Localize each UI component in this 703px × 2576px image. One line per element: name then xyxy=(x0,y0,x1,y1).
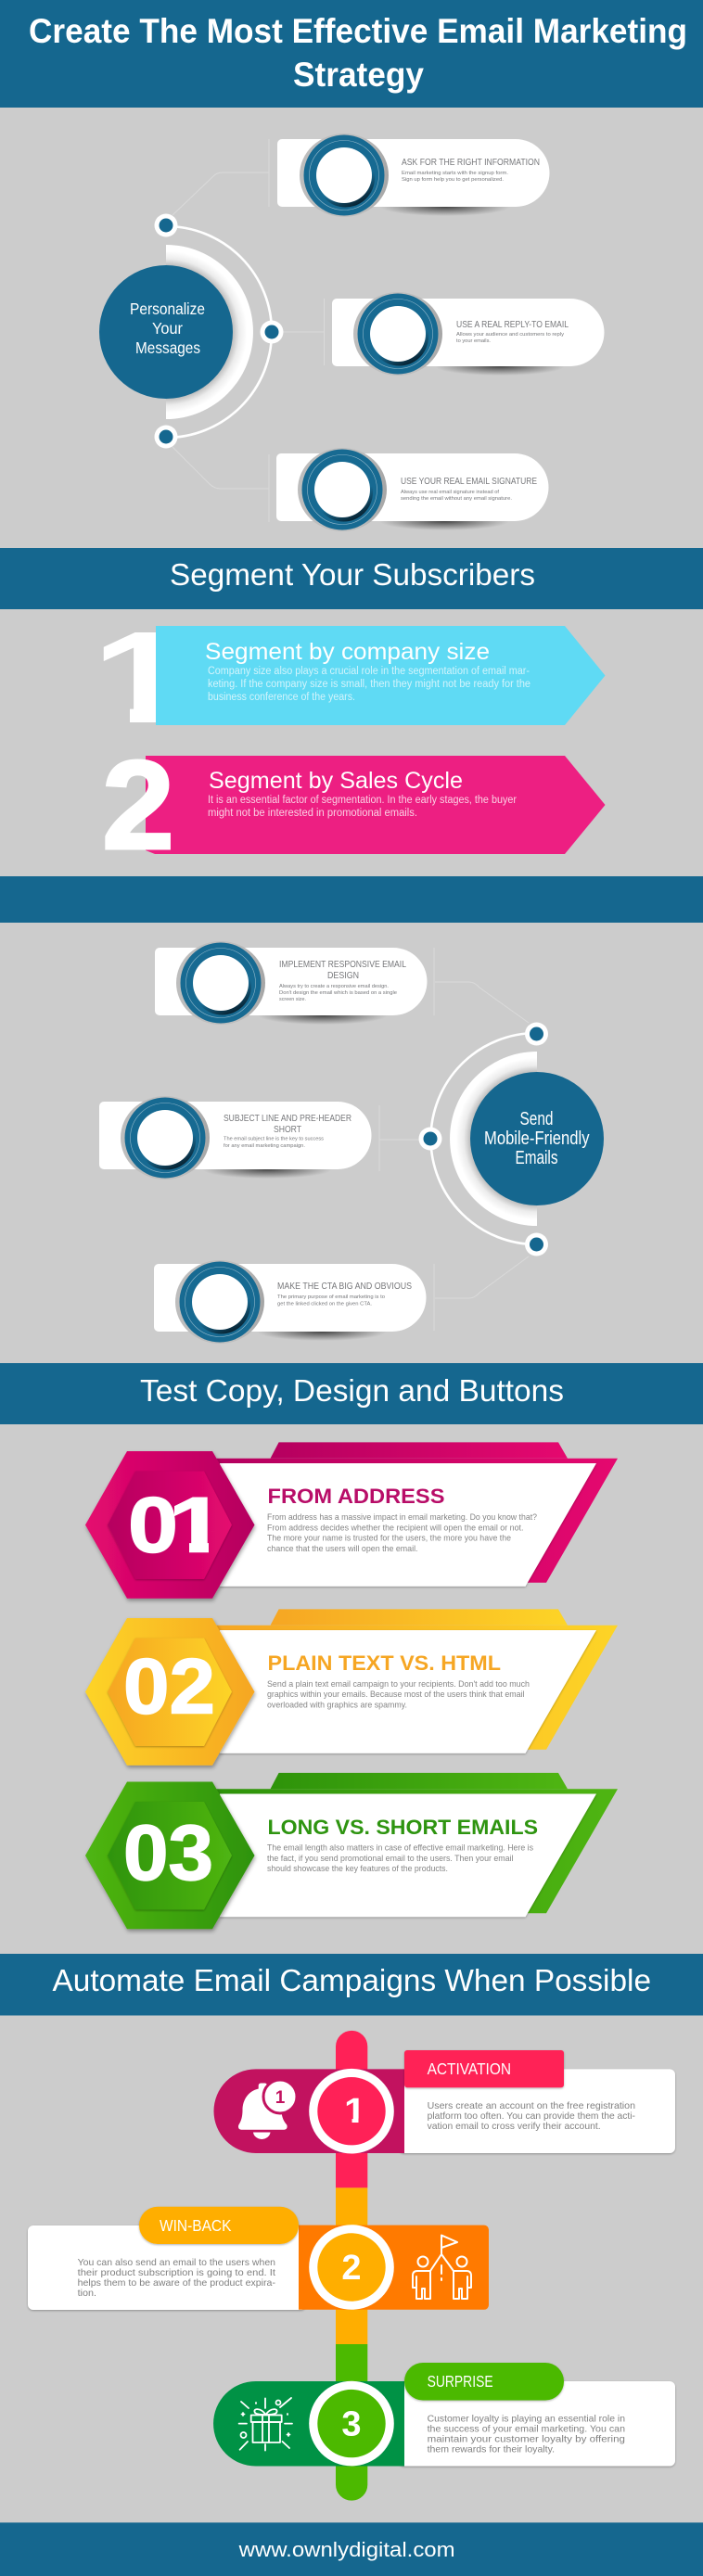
hub: personalize your messages: Personalize xyxy=(130,300,205,318)
option 02: plain text vs. html: Send a plain text email campaign to your recipients. Don't add too much xyxy=(267,1679,530,1690)
hexagon badge 01: 0 xyxy=(128,1482,178,1569)
timeline spine xyxy=(336,2031,367,2501)
hexagon badge 01: 1 xyxy=(168,1482,226,1569)
card: use your real email signature: USE YOUR REAL EMAIL SIGNATURE xyxy=(401,477,537,487)
arrow panel: segment by sales cycle xyxy=(102,734,605,875)
panel: send mobile-friendly emails xyxy=(99,941,604,1344)
step 2: win-back: You can also send an email to the users when xyxy=(78,2257,275,2268)
card: use a real reply-to email: to your emails. xyxy=(456,338,491,344)
number badge 2 xyxy=(309,2225,394,2310)
numeral 1: 1 xyxy=(91,604,192,750)
card: use your real email signature: sending the email without any email signature. xyxy=(401,496,512,502)
title banner: Create The Most Effective Email Marketing xyxy=(29,12,687,50)
arrow panel: segment by company size: keting. If the company size is small, then they might not be ready for the xyxy=(208,679,530,690)
step 2: win-back: tion. xyxy=(78,2288,96,2299)
section heading: automate email campaigns when possible xyxy=(0,1954,703,2016)
section heading: segment your subscribers xyxy=(0,548,703,609)
arrow panel: segment by company size xyxy=(104,626,605,725)
card: implement responsive email design: IMPLEMENT RESPONSIVE EMAIL xyxy=(279,960,406,970)
icon: gift box xyxy=(239,2398,292,2451)
arrow panel: segment by sales cycle: It is an essential factor of segmentation. In the early stages, the buyer xyxy=(208,795,517,806)
connector lines xyxy=(379,948,529,1331)
option 01: from address xyxy=(85,1442,618,1599)
step 3: surprise: Customer loyalty is playing an essential role in xyxy=(428,2413,625,2424)
card: ask for the right information: ASK FOR THE RIGHT INFORMATION xyxy=(402,158,540,168)
icon: notification bell: 1 xyxy=(275,2088,286,2108)
hub: send mobile-friendly emails: Emails xyxy=(516,1148,558,1168)
card: implement responsive email design: Always try to create a responsive email design. xyxy=(279,984,389,989)
title banner: Strategy xyxy=(293,56,424,94)
step 2: win-back xyxy=(28,2207,489,2310)
number badge 3: 3 xyxy=(341,2405,362,2444)
number badge 1: 1 xyxy=(344,2092,365,2131)
connector lines xyxy=(173,139,325,522)
card: implement responsive email design: DESIGN xyxy=(327,971,359,981)
option 02: plain text vs. html: overloaded with graphics are spammy. xyxy=(267,1701,407,1710)
card: ask for the right information xyxy=(277,134,549,217)
option 01: from address: From address has a massive impact in email marketing. Do you know that? xyxy=(267,1512,537,1523)
option 01: from address: The more your name is trusted for the users, the more you have the xyxy=(267,1534,511,1543)
step 3: surprise: the success of your email marketing. You can xyxy=(428,2424,625,2435)
arrow panel: segment by sales cycle: Segment by Sales Cycle xyxy=(209,768,463,794)
card: use a real reply-to email: Allows your audience and customers to reply xyxy=(456,332,564,338)
step 2: win-back: their product subscription is going to end. It xyxy=(78,2267,275,2278)
panel: personalize your messages xyxy=(99,134,605,531)
arrow panel: segment by sales cycle: might not be interested in promotional emails. xyxy=(208,808,417,819)
number badge 2: 2 xyxy=(341,2249,362,2288)
step 2: win-back: WIN-BACK xyxy=(160,2216,232,2235)
card: implement responsive email design xyxy=(155,941,427,1025)
title banner xyxy=(0,0,703,108)
option 03: long vs. short emails: should showcase the key features of the products. xyxy=(267,1864,448,1874)
card: subject line and pre-header short xyxy=(99,1096,371,1180)
hexagon badge 02 xyxy=(85,1618,254,1766)
option 02: plain text vs. html: PLAIN TEXT VS. HTML xyxy=(267,1651,501,1675)
card: subject line and pre-header short: The email subject line is the key to success xyxy=(224,1137,324,1142)
arrow panel: segment by company size: business conference of the years. xyxy=(208,692,355,703)
hexagon badge 03 xyxy=(85,1782,254,1929)
card: make the cta big and obvious: The primary purpose of email marketing is to xyxy=(277,1294,385,1300)
option 01: from address: chance that the users will open the email. xyxy=(267,1544,417,1554)
arrow panel: segment by company size: Company size also plays a crucial role in the segmentation of email mar- xyxy=(208,666,530,677)
arrow panel: segment by company size: Segment by company size xyxy=(205,639,490,665)
card: use your real email signature: Always use real email signature instead of xyxy=(401,490,499,495)
step 3: surprise: them rewards for their loyalty. xyxy=(428,2444,555,2455)
section heading: test copy, design and buttons: Test Copy, Design and Buttons xyxy=(140,1373,564,1408)
card: implement responsive email design: screen size. xyxy=(279,997,306,1002)
step 1: activation: platform too often. You can provide them the acti- xyxy=(428,2111,635,2122)
step 1: activation: ACTIVATION xyxy=(428,2060,511,2078)
card: make the cta big and obvious: get the linked clicked on the given CTA. xyxy=(277,1302,372,1307)
card: use a real reply-to email: USE A REAL REPLY-TO EMAIL xyxy=(456,320,569,330)
number badge 1 xyxy=(309,2069,394,2153)
numeral 2: 2 xyxy=(102,734,174,875)
section heading: automate email campaigns when possible: Automate Email Campaigns When Possible xyxy=(52,1963,651,1997)
step 2: win-back: helps them to be aware of the product expira- xyxy=(78,2277,275,2289)
icon: people raising flag xyxy=(413,2235,471,2299)
option 01: from address: FROM ADDRESS xyxy=(267,1485,445,1508)
section band: mobile-friendly xyxy=(0,876,703,923)
hub: personalize your messages xyxy=(99,226,272,438)
option 03: long vs. short emails: The email length also matters in case of effective email marketing. Here is xyxy=(267,1843,533,1853)
section heading: test copy, design and buttons xyxy=(0,1363,703,1424)
icon: notification bell xyxy=(238,2080,297,2139)
hub: send mobile-friendly emails: Send xyxy=(519,1109,553,1129)
step 3: surprise: SURPRISE xyxy=(428,2372,493,2391)
option 02: plain text vs. html: graphics within your emails. Because most of the users think that email xyxy=(267,1690,525,1700)
card: subject line and pre-header short: SHORT xyxy=(274,1125,301,1135)
card: use a real reply-to email xyxy=(332,292,605,376)
card: implement responsive email design: Don't design the email which is based on a single xyxy=(279,990,397,996)
option 03: long vs. short emails xyxy=(85,1773,618,1929)
step 1: activation: Users create an account on the free registration xyxy=(428,2100,635,2111)
option 02: plain text vs. html xyxy=(85,1609,618,1766)
option 03: long vs. short emails: LONG VS. SHORT EMAILS xyxy=(267,1816,538,1839)
section heading: segment your subscribers: Segment Your Subscribers xyxy=(170,557,535,592)
node dots xyxy=(154,213,284,449)
step 1: activation xyxy=(213,2050,675,2153)
footer xyxy=(0,2522,703,2576)
card: ask for the right information: Email marketing starts with the signup form. xyxy=(402,171,508,176)
card: make the cta big and obvious xyxy=(154,1260,427,1344)
hexagon badge 02: 02 xyxy=(123,1643,215,1730)
step 3: surprise xyxy=(213,2363,675,2467)
footer: www.ownlydigital.com xyxy=(238,2538,455,2561)
hexagon badge 03: 03 xyxy=(123,1809,213,1896)
hub: send mobile-friendly emails xyxy=(431,1033,604,1244)
step 1: activation: vation email to cross verify their account. xyxy=(428,2121,601,2132)
card: subject line and pre-header short: SUBJECT LINE AND PRE-HEADER xyxy=(224,1114,352,1124)
card: ask for the right information: Sign up form help you to get personalized. xyxy=(402,177,504,183)
hub: send mobile-friendly emails: Mobile-Friendly xyxy=(484,1129,590,1149)
card: make the cta big and obvious: MAKE THE CTA BIG AND OBVIOUS xyxy=(277,1282,412,1292)
number badge 3 xyxy=(309,2381,394,2466)
hub: personalize your messages: Messages xyxy=(135,338,200,357)
option 03: long vs. short emails: the fact, if you send promotional email to the users. Then your email xyxy=(267,1854,514,1864)
hub: personalize your messages: Your xyxy=(152,319,183,338)
card: subject line and pre-header short: for any email marketing campaign. xyxy=(224,1143,305,1149)
node dots xyxy=(419,1022,548,1256)
card: use your real email signature xyxy=(276,448,549,531)
hexagon badge 01 xyxy=(85,1451,254,1599)
step 3: surprise: maintain your customer loyalty by offering xyxy=(428,2433,625,2444)
option 01: from address: From address decides whether the recipient will open the email or not. xyxy=(267,1523,523,1534)
